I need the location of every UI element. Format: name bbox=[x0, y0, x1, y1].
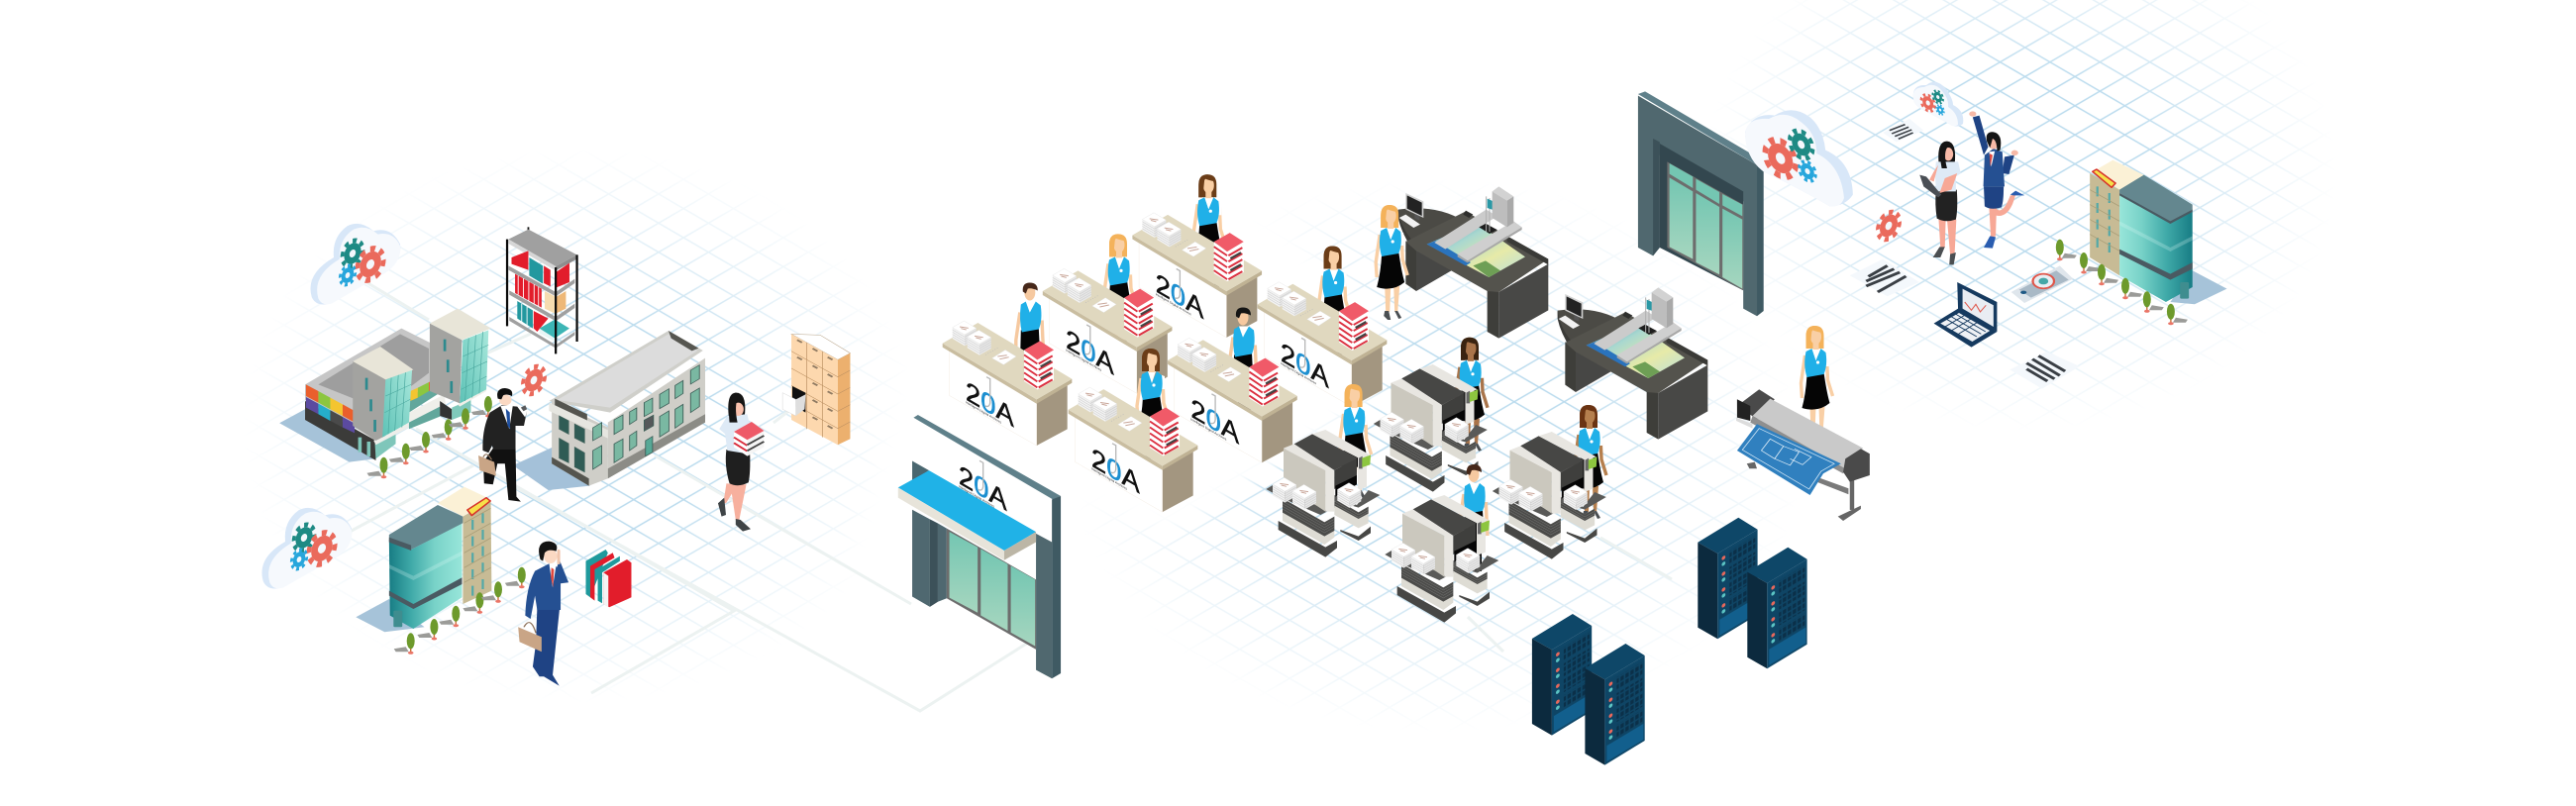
small cloud with gears, top right bbox=[1913, 82, 1963, 127]
left office complex with glass towers bbox=[279, 309, 491, 462]
file cabinet bbox=[782, 334, 850, 445]
counter desk 3 with attendant: 20A bbox=[1156, 267, 1204, 326]
glass tower with sign, right bbox=[2090, 160, 2227, 304]
entrance with blue awning and logo bbox=[898, 415, 1061, 678]
counter desk 5 with attendant bbox=[1168, 307, 1297, 462]
counter desk 1 with attendant: Intelligent Digital Archives bbox=[966, 400, 1001, 425]
scanning station B with operator bbox=[1374, 338, 1488, 492]
scanning station C with operator bbox=[1385, 464, 1498, 623]
counter desk 2 with attendant: 20A bbox=[1066, 324, 1114, 381]
woman in white blouse carrying red files bbox=[718, 393, 764, 532]
large format flatbed scanner 2 bbox=[1558, 287, 1707, 440]
counter desk 1 with attendant: 20A bbox=[966, 375, 1014, 434]
trees, left complex bbox=[366, 396, 492, 478]
businessman in black suit with briefcase bbox=[478, 388, 527, 502]
entrance logo: Intelligent Digital Archives bbox=[959, 484, 994, 509]
counter desk 3 with attendant: Intelligent Digital Archives bbox=[1156, 292, 1191, 317]
cheering woman in navy suit bbox=[1969, 111, 2024, 249]
trees, lower tower bbox=[394, 567, 526, 655]
counter desk 2 with attendant bbox=[1043, 234, 1172, 393]
trees, right tower bbox=[2056, 240, 2188, 325]
red and teal binders bbox=[585, 550, 631, 607]
server racks, lower pair bbox=[1532, 614, 1645, 765]
glass tower with sign, lower left bbox=[356, 487, 491, 632]
standing attendant, blonde bbox=[1376, 205, 1407, 320]
scanning station A with operator bbox=[1266, 384, 1380, 557]
bookshelf bbox=[507, 227, 577, 353]
smartphone with gauge bbox=[2011, 265, 2073, 303]
document sheet, lower bbox=[2009, 352, 2080, 389]
counter desk 3 with attendant bbox=[1132, 174, 1262, 338]
counter desk 4 with attendant: 20A bbox=[1091, 442, 1140, 500]
counter desk 6 with attendant: Intelligent Digital Archives bbox=[1281, 361, 1316, 386]
cloud with gears, lower left bbox=[261, 508, 352, 588]
server racks, upper pair bbox=[1698, 518, 1807, 668]
counter desk 4 with attendant bbox=[1069, 349, 1197, 512]
woman with tablet bbox=[1919, 142, 1961, 264]
businessman in blue suit on the phone bbox=[518, 542, 568, 686]
cloud with gears, upper right bbox=[1745, 110, 1853, 207]
scanning station D with operator bbox=[1493, 405, 1606, 559]
laptop with line chart bbox=[1934, 282, 1997, 348]
counter desk 1 with attendant bbox=[943, 283, 1072, 446]
counter desk 5 with attendant: Intelligent Digital Archives bbox=[1190, 417, 1227, 442]
document sheet, small bbox=[1883, 119, 1923, 142]
lone red gear, right bbox=[1878, 209, 1900, 243]
counter desk 6 with attendant bbox=[1258, 246, 1387, 407]
back entrance doorway bbox=[1638, 91, 1764, 316]
counter desk 4 with attendant: Intelligent Digital Archives bbox=[1091, 466, 1127, 491]
counter desk 6 with attendant: 20A bbox=[1281, 337, 1329, 395]
cloud with gears, upper left bbox=[310, 224, 400, 304]
entrance logo: 20A bbox=[959, 459, 1007, 518]
counter desk 2 with attendant: Intelligent Digital Archives bbox=[1066, 349, 1101, 372]
lone red gear, left bbox=[523, 363, 545, 397]
counter desk 5 with attendant: 20A bbox=[1190, 392, 1239, 451]
document sheet, left bbox=[1850, 259, 1919, 296]
wide plotter printing blueprint bbox=[1736, 389, 1870, 521]
large format flatbed scanner 1 bbox=[1398, 186, 1548, 339]
operator behind plotter bbox=[1801, 326, 1832, 441]
classical gray building bbox=[513, 331, 705, 490]
